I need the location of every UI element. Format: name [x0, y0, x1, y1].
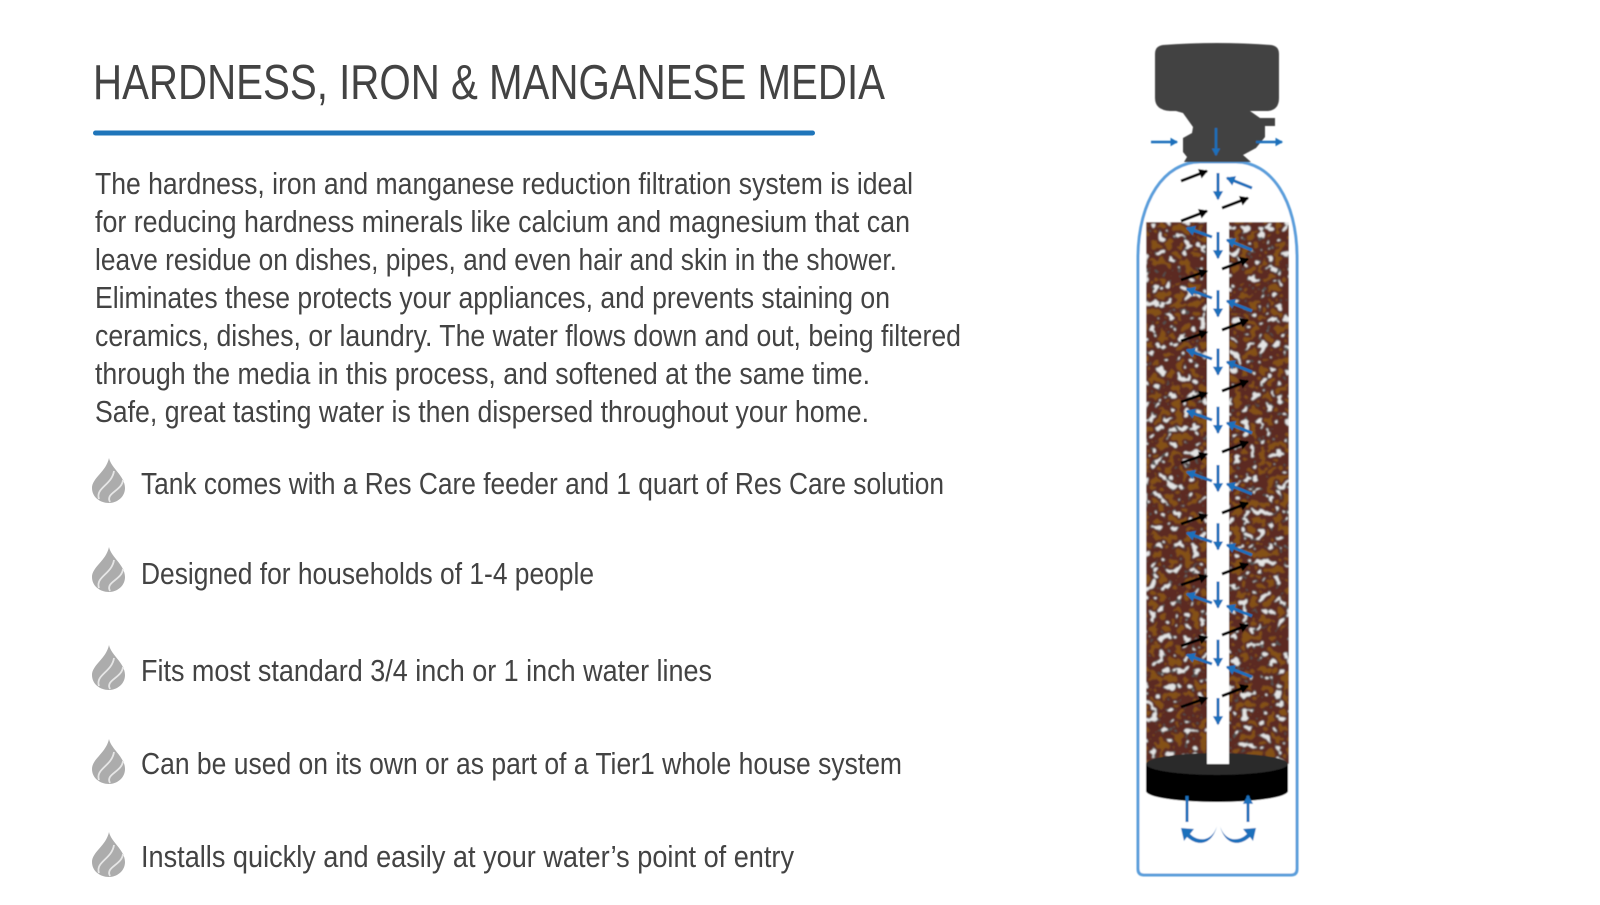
control head	[1155, 43, 1279, 162]
tank outline	[1138, 162, 1297, 875]
bottom return arrows	[1181, 796, 1256, 843]
bullet 3: Fits most standard 3/4 inch or 1 inch water lines	[141, 654, 712, 688]
riser downward flow arrows	[1217, 232, 1219, 724]
bullet 1	[92, 458, 944, 503]
intro paragraph: ceramics, dishes, or laundry. The water flows down and out, being filtered	[95, 319, 961, 353]
bullet 2: Designed for households of 1-4 people	[141, 557, 594, 591]
bullet 3	[92, 645, 712, 690]
intro paragraph: Safe, great tasting water is then dispersed throughout your home.	[95, 395, 869, 429]
intro paragraph: leave residue on dishes, pipes, and even hair and skin in the shower.	[95, 243, 897, 277]
title: HARDNESS, IRON & MANGANESE MEDIA	[93, 56, 885, 110]
filtration tank diagram	[1138, 43, 1297, 875]
title underline	[93, 130, 815, 136]
intro paragraph: The hardness, iron and manganese reduction filtration system is ideal	[95, 167, 913, 201]
bullet list	[92, 458, 944, 877]
bullet 4	[92, 739, 902, 784]
intro paragraph	[95, 167, 961, 429]
centre riser tube	[1207, 222, 1229, 764]
bullet 4: Can be used on its own or as part of a Tier1 whole house system	[141, 747, 902, 781]
bullet 1: Tank comes with a Res Care feeder and 1 quart of Res Care solution	[141, 467, 944, 501]
intro paragraph: Eliminates these protects your appliances, and prevents staining on	[95, 281, 890, 315]
intro paragraph: through the media in this process, and softened at the same time.	[95, 357, 870, 391]
bottom distributor disc	[1146, 753, 1288, 802]
inlet and outlet arrows	[1151, 128, 1282, 155]
bullet 2	[92, 547, 594, 592]
media bed	[1146, 222, 1289, 764]
intro paragraph: for reducing hardness minerals like calcium and magnesium that can	[95, 205, 910, 239]
bullet 5	[92, 832, 795, 877]
media diagonal flow arrows	[1181, 228, 1252, 707]
dome flow arrows	[1181, 171, 1252, 221]
bullet 5: Installs quickly and easily at your water’s point of entry	[141, 840, 795, 874]
